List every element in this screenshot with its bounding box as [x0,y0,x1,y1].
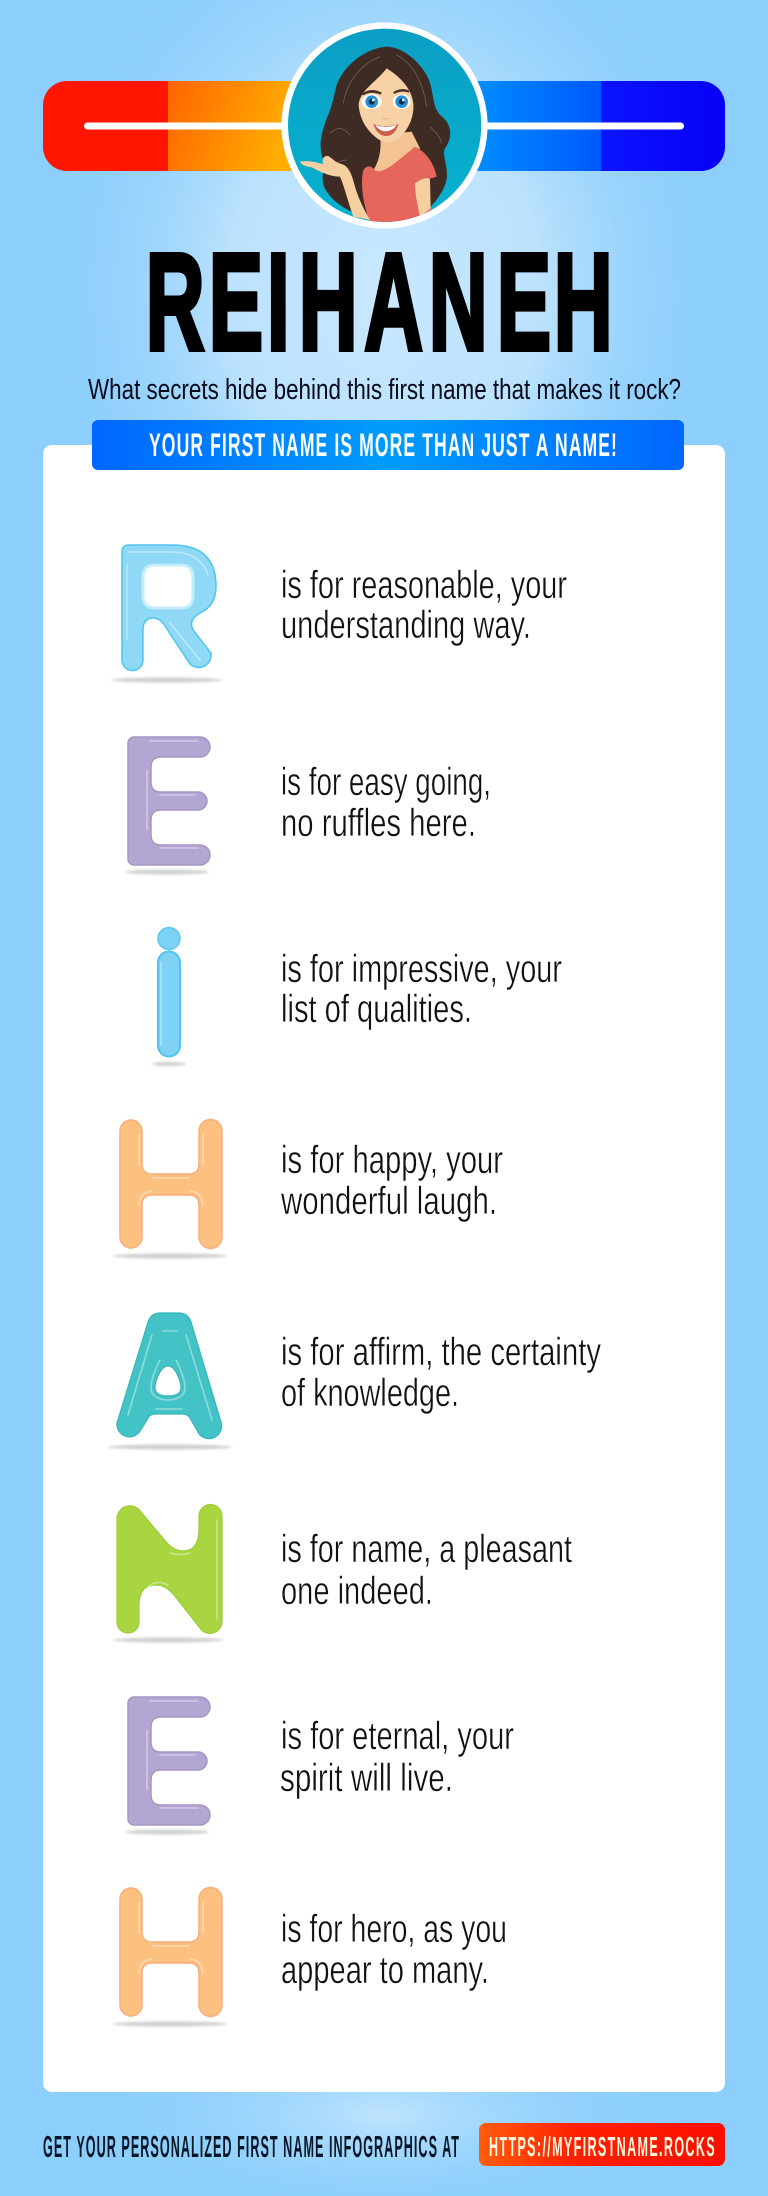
text: of knowledge. [281,1372,459,1415]
text [281,1331,601,1415]
row: I [152,928,562,1066]
icon: letter E [125,1697,210,1834]
arm and sleeve [415,178,431,217]
text: is for eternal, your [281,1715,514,1758]
icon: letter E [125,737,210,874]
text: wonderful laugh. [280,1180,497,1223]
text: spirit will live. [280,1757,453,1800]
icon: letter R [112,545,222,682]
icon: letter A [108,1313,232,1450]
row: E second [125,1697,514,1834]
text [281,1908,507,1992]
nose [382,118,390,120]
eyes [362,94,411,109]
icon: letter N [113,1505,223,1642]
text: is for happy, your [281,1139,503,1182]
row: A [108,1313,601,1450]
text [281,948,562,1031]
smile [373,124,398,136]
text [280,1715,514,1800]
text: list of qualities. [281,988,472,1031]
text: is for hero, as you [281,1908,507,1951]
text [281,1528,572,1613]
text [280,1139,503,1223]
text: one indeed. [281,1570,433,1613]
text: is for name, a pleasant [281,1528,572,1571]
row: R [112,545,567,682]
row: H [113,1120,503,1258]
text: is for impressive, your [281,948,562,991]
white content panel [43,445,725,2092]
text [281,564,567,647]
row: H second [113,1888,507,2026]
row: N [113,1505,572,1642]
text: no ruffles here. [281,802,476,845]
icon: letter H [113,1888,227,2026]
icon: letter H [113,1120,227,1258]
text: appear to many. [281,1949,489,1992]
face [359,68,413,142]
text: understanding way. [281,604,531,647]
hair streaks [330,55,442,170]
header colour bar [43,81,725,171]
title: REIHANEH [146,225,613,380]
brows [362,89,409,95]
row: E [125,737,491,874]
text [281,761,491,845]
banner [92,420,684,470]
text: is for affirm, the certainty [281,1331,601,1374]
text: is for easy going, [281,761,491,804]
text: is for reasonable, your [281,564,567,607]
raised arm and hand [300,156,370,220]
avatar portrait [282,22,488,228]
footer url button [479,2123,725,2166]
shirt [362,147,437,223]
icon: letter I [152,928,186,1066]
hair [321,47,450,215]
neck [374,132,420,172]
